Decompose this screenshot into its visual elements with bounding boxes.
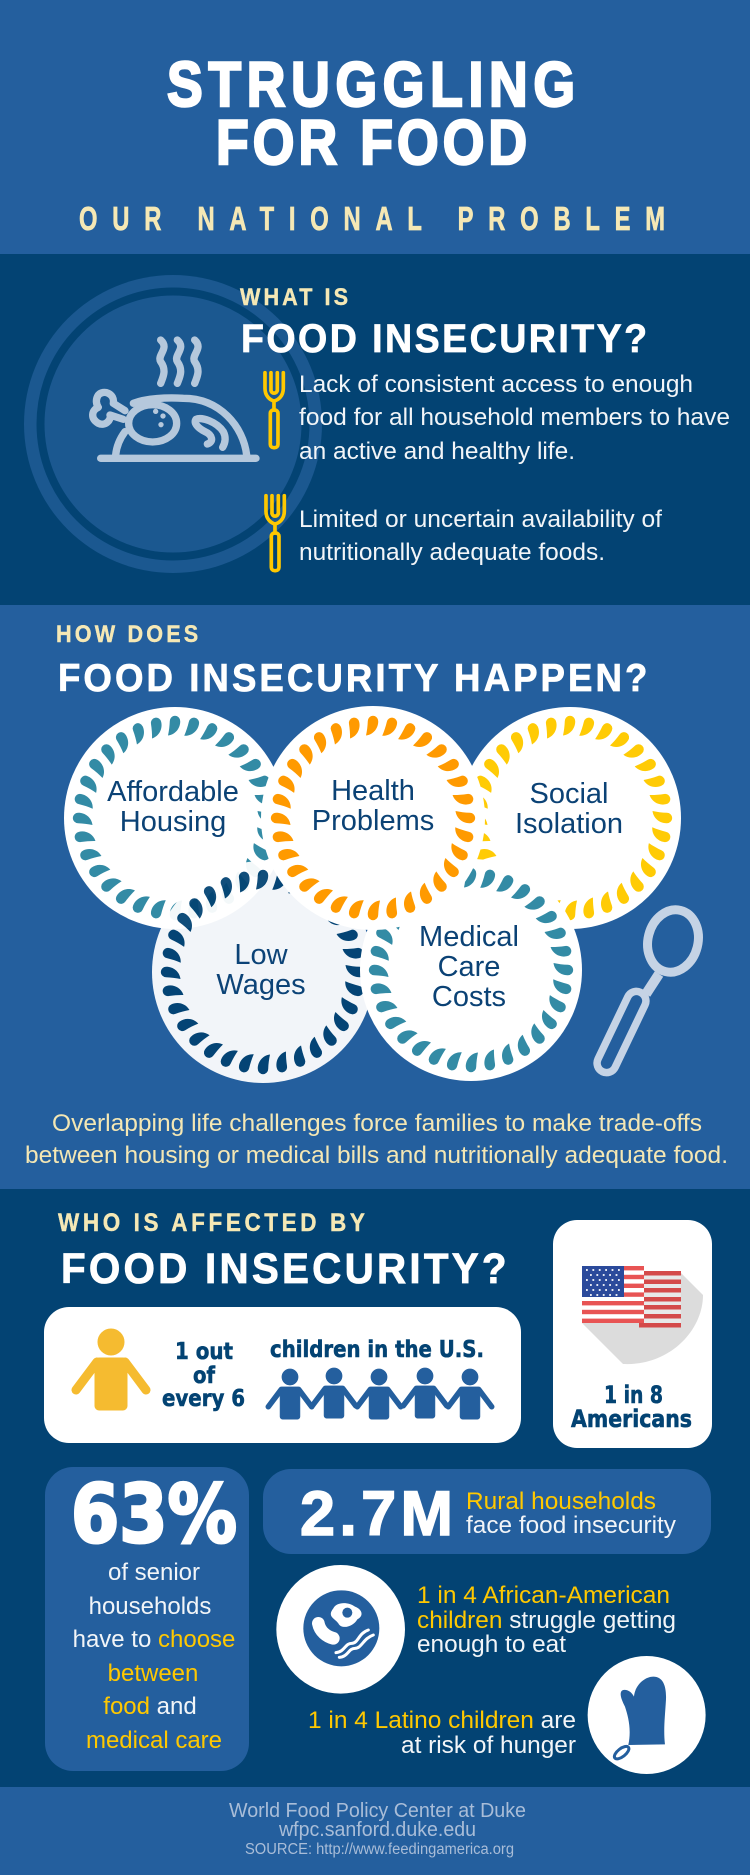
heading: food insecurity happen: FOOD INSECURITY HAPPEN? [58, 657, 647, 700]
text block: overlapping challenges: between housing or medical bills and nutritionally adequate food. [25, 1142, 728, 1169]
heading: who is affected by: WHO IS AFFECTED BY [58, 1209, 365, 1237]
circle: medical care costs: Medical [419, 921, 519, 953]
icon: fork [266, 496, 284, 571]
text block: overlapping challenges: Overlapping life challenges force families to make trade-offs [52, 1110, 702, 1137]
text: one out of every six: 1 out [175, 1339, 233, 1365]
circle: health problems: Health [331, 775, 415, 807]
stat: 2.7 million: 2.7M [300, 1479, 453, 1549]
text: african-american children: children struggle getting [417, 1607, 676, 1634]
text: senior households: households [89, 1593, 211, 1620]
text: footer credits [229, 1800, 526, 1858]
icon: plate [24, 275, 322, 573]
text: senior households: medical care [86, 1727, 222, 1754]
stat: 63 percent: 63% [71, 1468, 237, 1561]
text: footer credits: World Food Policy Center at Duke [229, 1800, 526, 1822]
heading: food insecurity: FOOD INSECURITY? [241, 317, 647, 361]
text block: definition one: an active and healthy life. [299, 438, 575, 465]
circle: social isolation: Social [530, 778, 608, 810]
text: senior households [73, 1559, 235, 1754]
text block: definition one: food for all household members to have [299, 404, 730, 431]
circle: social isolation [459, 707, 681, 929]
circle: low wages: Wages [216, 969, 306, 1001]
circle: affordable housing: Housing [120, 806, 226, 838]
text: one out of every six [162, 1339, 245, 1412]
circle: health problems [261, 706, 485, 930]
circle: health problems: Problems [312, 805, 434, 837]
circle: low wages: Low [234, 939, 289, 971]
circle: affordable housing: Affordable [107, 776, 239, 808]
text block: definition one [299, 371, 730, 465]
panel: one in eight americans [553, 1220, 712, 1448]
icon: spoon [594, 904, 705, 1076]
circle: affordable housing [64, 707, 286, 929]
icon: row of children [268, 1368, 492, 1419]
heading: what is: WHAT IS [240, 283, 348, 310]
text: african-american children [417, 1582, 676, 1658]
text: african-american children: enough to eat [417, 1631, 566, 1658]
panel: who is affected [0, 1189, 750, 1787]
icon: american flag [582, 1266, 703, 1364]
text: latino children: at risk of hunger [401, 1732, 576, 1759]
text block: definition one: Lack of consistent access to enough [299, 371, 693, 398]
text block: definition two [299, 506, 662, 566]
circle: medical care costs: Costs [432, 981, 506, 1013]
text: one out of every six: every 6 [162, 1386, 245, 1412]
text: senior households: have to choose [73, 1626, 235, 1653]
text: senior households: of senior [108, 1559, 200, 1586]
text block: overlapping challenges [25, 1110, 728, 1169]
panel: what is food insecurity [0, 254, 750, 605]
text: latino children [308, 1707, 576, 1759]
icon: fork [265, 373, 283, 448]
text: senior households: food and [103, 1693, 197, 1720]
text block: definition two: nutritionally adequate foods. [299, 539, 605, 566]
text block: definition two: Limited or uncertain availability of [299, 506, 662, 533]
title: STRUGGLING [167, 50, 575, 120]
title: FOR FOOD [216, 108, 527, 178]
icon: breakfast plate [276, 1565, 405, 1694]
circle: low wages [152, 861, 374, 1083]
panel: footer [0, 1787, 750, 1875]
text: latino children: 1 in 4 Latino children are [308, 1707, 576, 1734]
heading: food insecurity: FOOD INSECURITY? [61, 1244, 507, 1292]
text: one out of every six: of [193, 1363, 216, 1389]
circle: medical care costs: Care [438, 951, 500, 983]
icon: roast chicken [93, 340, 256, 458]
subtitle: OUR NATIONAL PROBLEM [79, 201, 665, 238]
panel: rural households: face food insecurity [466, 1512, 676, 1539]
text: senior households: between [108, 1660, 198, 1687]
circle: medical care costs [360, 859, 582, 1081]
panel: rural households [263, 1469, 711, 1554]
text: one in eight americans: 1 in 8 [604, 1381, 663, 1409]
text: rural households: Rural households [466, 1488, 656, 1515]
text: footer credits: SOURCE: http://www.feedingamerica.org [245, 1841, 514, 1858]
text: children in the U.S.: children in the U.S. [270, 1337, 484, 1363]
icon: yellow child [76, 1329, 146, 1410]
text: footer credits: wfpc.sanford.duke.edu [278, 1819, 476, 1841]
title [167, 50, 575, 178]
panel: how does food insecurity happen [0, 605, 750, 1189]
panel: children statistic [44, 1307, 521, 1443]
panel: one in eight americans: Americans [571, 1405, 692, 1433]
heading: how does: HOW DOES [56, 620, 198, 647]
panel: senior households [45, 1467, 249, 1771]
circle: social isolation: Isolation [515, 808, 623, 840]
panel: header background [0, 0, 750, 254]
icon: oven mitt [588, 1656, 706, 1774]
text: african-american children: 1 in 4 African-American [417, 1582, 670, 1609]
